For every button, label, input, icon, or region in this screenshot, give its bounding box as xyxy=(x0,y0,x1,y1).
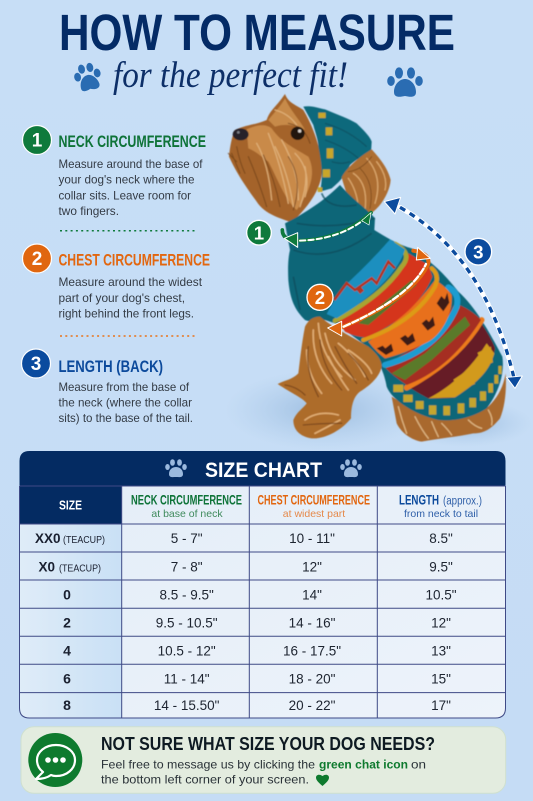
callout: sizing help xyxy=(21,727,506,793)
row: 6 xyxy=(63,670,451,686)
column head: chest: at widest part xyxy=(283,508,345,520)
row: 6: 11 - 14" xyxy=(164,672,210,686)
text block: chest instructions xyxy=(58,275,203,320)
blue patterned band xyxy=(327,239,405,318)
row: 0: 10.5" xyxy=(425,588,457,602)
icon: dog badge 2 xyxy=(307,284,333,310)
panel: step 1 neck xyxy=(22,126,206,218)
icon: green chat xyxy=(28,733,82,787)
text block: length instructions: the neck (where the collar xyxy=(58,396,192,410)
callout text: on xyxy=(411,758,426,772)
rear fur strokes xyxy=(398,407,492,438)
dog artwork xyxy=(228,94,506,442)
icon: dog badge 1: 1 xyxy=(254,222,264,243)
ear xyxy=(342,149,391,217)
row: 2: 9.5 - 10.5" xyxy=(156,616,218,630)
column head: chest: CHEST CIRCUMFERENCE xyxy=(258,492,370,508)
table background xyxy=(20,451,506,718)
icon: dog badge 3: 3 xyxy=(473,241,484,262)
icon: heart xyxy=(316,775,329,786)
row: 4 xyxy=(63,642,451,658)
head fur xyxy=(229,94,322,223)
text block: neck instructions xyxy=(58,157,203,218)
callout heading: NOT SURE WHAT SIZE YOUR DOG NEEDS? xyxy=(101,734,435,754)
column head: length xyxy=(399,492,482,520)
icon: left paw xyxy=(72,61,104,93)
row: 2: 12" xyxy=(431,616,451,630)
row: X0: (TEACUP) xyxy=(59,564,101,574)
column head: neck: at base of neck xyxy=(151,508,223,520)
icon: badge 2: 2 xyxy=(32,249,42,270)
row: 6: 6 xyxy=(63,670,71,686)
row: XX0: 8.5" xyxy=(429,531,453,546)
row: 0: 14" xyxy=(302,588,322,602)
row: 8 xyxy=(63,697,451,713)
arrow: length measure xyxy=(384,197,522,388)
column head: neck: NECK CIRCUMFERENCE xyxy=(131,492,242,508)
text block: length instructions: sits) to the base of the tail. xyxy=(58,411,193,425)
row: 8: 17" xyxy=(431,698,451,713)
row: XX0: 5 - 7" xyxy=(171,531,203,546)
text block: length instructions xyxy=(58,380,193,425)
row: 0: 0 xyxy=(63,586,71,602)
olive trim xyxy=(335,244,406,321)
orange llama band xyxy=(368,280,452,358)
row: 6: 15" xyxy=(431,672,451,686)
icon: badge 3: 3 xyxy=(31,354,41,375)
callout text: Feel free to message us by clicking the xyxy=(101,758,315,772)
size column shading xyxy=(20,524,122,718)
hem motifs xyxy=(393,366,502,415)
callout text xyxy=(101,758,426,786)
row: 2 xyxy=(63,614,451,630)
text block: chest instructions: part of your dog's chest, xyxy=(58,291,185,305)
maroon and gold band xyxy=(408,322,495,398)
neck roll detail xyxy=(293,193,375,310)
text block: neck instructions: two fingers. xyxy=(58,204,119,218)
row: XX0: XX0 xyxy=(35,531,61,546)
panel: size chart xyxy=(20,451,506,718)
heading: chest circumference: CHEST CIRCUMFERENCE xyxy=(58,250,210,270)
row: 4: 13" xyxy=(431,644,451,658)
chart header xyxy=(20,451,506,486)
icon: header paw right xyxy=(340,459,362,477)
text block: neck instructions: collar sits. Leave room for xyxy=(58,188,191,202)
row: X0: 9.5" xyxy=(429,560,453,574)
text block: neck instructions: Measure around the base of xyxy=(58,157,203,171)
column head: neck xyxy=(131,492,242,520)
sweater body xyxy=(285,185,503,420)
heading: size chart: SIZE CHART xyxy=(205,459,322,482)
column head: size xyxy=(20,486,122,524)
panel: step 2 chest xyxy=(22,244,210,320)
text block: length instructions: Measure from the base of xyxy=(58,380,190,394)
knit hood xyxy=(303,106,372,192)
row: 2: 14 - 16" xyxy=(289,616,336,630)
text block: chest instructions: Measure around the widest xyxy=(58,275,203,289)
icon: dog badge 1 xyxy=(247,220,271,245)
front leg fur xyxy=(278,317,382,438)
row: XX0: (TEACUP) xyxy=(63,535,105,546)
icon: right paw xyxy=(387,67,423,97)
row: X0: 12" xyxy=(302,560,322,574)
title: HOW TO MEASURE xyxy=(59,4,455,61)
column head: size: SIZE xyxy=(59,498,82,512)
icon: badge 2 xyxy=(22,244,52,273)
icon: header paw left xyxy=(165,459,187,477)
icon: badge 3 xyxy=(22,349,50,378)
panel: step 3 length xyxy=(22,349,193,425)
eye and nose xyxy=(233,127,305,140)
column head: length: from neck to tail xyxy=(404,508,478,520)
row: 0 xyxy=(63,586,457,602)
icon: dog badge 3 xyxy=(465,238,492,265)
text block: chest instructions: right behind the front legs. xyxy=(58,306,194,320)
text block: neck instructions: your dog's neck where the xyxy=(58,172,195,186)
row: X0: X0 xyxy=(38,560,55,574)
row: 4: 10.5 - 12" xyxy=(158,644,216,658)
row: 2: 2 xyxy=(63,614,71,630)
row: XX0 xyxy=(35,531,453,546)
icon: badge 1: 1 xyxy=(32,130,43,152)
arrow: neck measure xyxy=(282,213,371,247)
subtitle: for the perfect fit! xyxy=(113,55,348,96)
heading: length back: LENGTH (BACK) xyxy=(58,357,163,376)
icon: badge 1 xyxy=(22,126,52,154)
rear fur xyxy=(392,373,506,442)
red and green band xyxy=(383,303,481,385)
callout text: the bottom left corner of your screen. xyxy=(101,772,309,786)
row: 8: 20 - 22" xyxy=(289,698,336,713)
row: XX0: 10 - 11" xyxy=(289,531,335,546)
callout text: green chat icon xyxy=(319,758,408,772)
row: 8: 8 xyxy=(63,697,71,713)
red band xyxy=(338,253,432,337)
row: 4: 4 xyxy=(63,642,71,658)
row: X0: 7 - 8" xyxy=(171,560,203,574)
row: 8: 14 - 15.50" xyxy=(154,698,220,713)
heading: neck circumference: NECK CIRCUMFERENCE xyxy=(58,132,206,151)
row: 6: 18 - 20" xyxy=(289,672,336,686)
arrow: chest measure xyxy=(328,247,430,336)
dog illustration xyxy=(225,94,532,450)
row: 0: 8.5 - 9.5" xyxy=(160,588,214,602)
column head: length: (approx.) xyxy=(443,496,482,508)
column head: chest xyxy=(258,492,370,520)
icon: dog badge 2: 2 xyxy=(315,287,325,308)
row: X0 xyxy=(38,560,453,574)
column head: length: LENGTH xyxy=(399,492,439,508)
row: 4: 16 - 17.5" xyxy=(283,644,341,658)
